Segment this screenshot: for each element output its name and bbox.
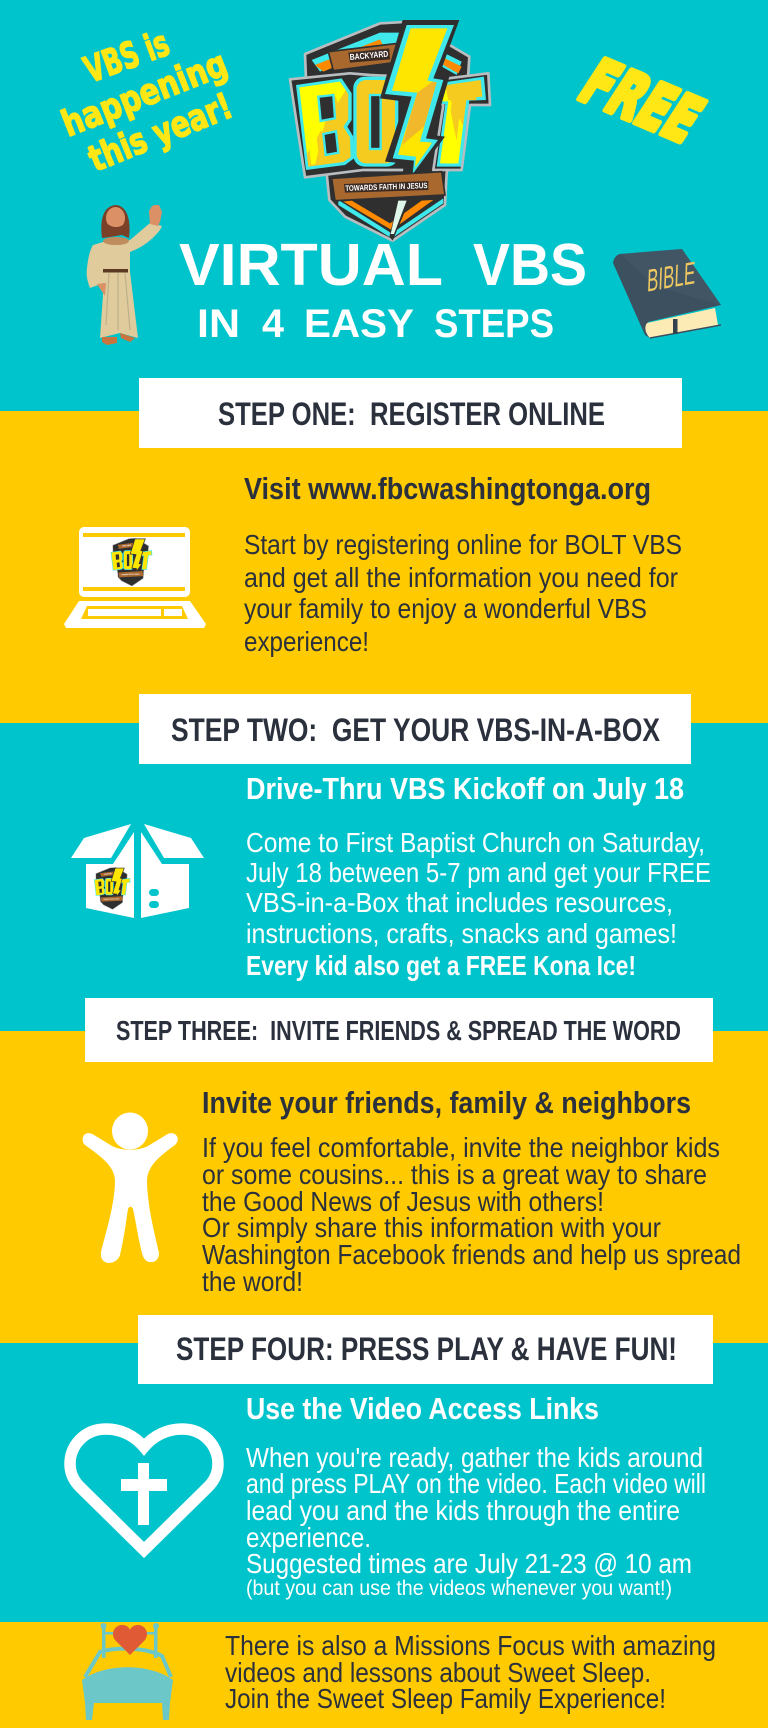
panel: step one	[64, 378, 682, 657]
step four body: lead you and the kids through the entire	[246, 1495, 680, 1526]
step one body: your family to enjoy a wonderful VBS	[244, 593, 647, 624]
title: in 4 easy steps: IN	[197, 302, 240, 346]
step three body	[202, 1132, 741, 1297]
title: Virtual VBS: VBS	[473, 232, 587, 298]
step two body: VBS-in-a-Box that includes resources,	[246, 887, 673, 918]
logo: Backyard BOLT: B	[297, 64, 351, 188]
small logo on laptop: O	[124, 547, 132, 575]
panel: step four	[70, 1315, 713, 1600]
small logo on box: T	[119, 877, 129, 900]
logo: Backyard BOLT	[290, 20, 490, 241]
small logo on box: TOWARDS FAITH IN JESUS	[103, 897, 119, 901]
small logo on laptop: BACKYARD	[122, 544, 132, 548]
step three subheading: Invite your friends, family & neighbors	[202, 1085, 691, 1120]
small logo on box: O	[106, 874, 113, 899]
step one body: experience!	[244, 626, 369, 657]
step four subheading: Use the Video Access Links	[246, 1391, 599, 1426]
step one subheading: Visit www.fbcwashingtonga.org	[244, 471, 651, 506]
step four body: When you're ready, gather the kids around	[246, 1442, 703, 1473]
step one banner	[139, 378, 682, 448]
logo: Backyard BOLT: BACKYARD	[349, 49, 389, 62]
logo: Backyard BOLT: O	[359, 60, 394, 188]
missions text: Join the Sweet Sleep Family Experience!	[225, 1683, 666, 1714]
logo: Backyard BOLT: T	[426, 65, 481, 187]
step two banner	[139, 694, 691, 764]
step two body	[246, 827, 711, 981]
text: VBS is happening this year	[56, 23, 238, 180]
icon: person with raised arms	[83, 1112, 178, 1263]
small logo on laptop	[111, 538, 152, 586]
small logo on box: BACKYARD	[104, 872, 112, 876]
step two body: instructions, crafts, snacks and games!	[246, 918, 677, 949]
text: VBS is happening this year: VBS is	[79, 23, 175, 91]
step one heading: STEP ONE: REGISTER ONLINE	[218, 396, 605, 432]
icon: Bible	[613, 249, 721, 338]
icon: open box	[71, 824, 204, 918]
step three body: the word!	[202, 1266, 303, 1297]
logo: Backyard BOLT: TOWARDS FAITH IN JESUS	[345, 181, 428, 193]
panel: step three	[83, 998, 741, 1297]
missions text: There is also a Missions Focus with amazing	[225, 1630, 716, 1661]
title: in 4 easy steps: STEPS	[434, 302, 554, 346]
step two body: Come to First Baptist Church on Saturday,	[246, 827, 705, 858]
step four body	[246, 1442, 706, 1600]
title: Virtual VBS	[179, 232, 587, 298]
step three body: the Good News of Jesus with others!	[202, 1186, 604, 1217]
missions text: videos and lessons about Sweet Sleep.	[225, 1657, 651, 1688]
step four body: Suggested times are July 21-23 @ 10 am	[246, 1548, 692, 1579]
step one body: and get all the information you need for	[244, 562, 678, 593]
icon: laptop	[64, 527, 206, 628]
panel: step two	[71, 694, 711, 981]
step one body	[244, 529, 682, 657]
panel: missions focus	[82, 1623, 716, 1720]
small logo on box: B	[94, 876, 105, 900]
step four body: (but you can use the videos whenever you want!)	[246, 1577, 672, 1600]
step three body: or some cousins... this is a great way to share	[202, 1159, 707, 1190]
step three body: If you feel comfortable, invite the neighbor kids	[202, 1132, 720, 1163]
small logo on laptop: B	[111, 548, 123, 575]
missions text	[225, 1630, 716, 1714]
title: Virtual VBS: VIRTUAL	[179, 232, 443, 298]
icon: Bible: BIBLE	[646, 255, 696, 299]
icon: Jesus figure	[87, 205, 162, 345]
step two heading: STEP TWO: GET YOUR VBS-IN-A-BOX	[171, 712, 661, 748]
small logo on box	[94, 867, 130, 909]
step four banner	[138, 1315, 713, 1384]
step three body: Or simply share this information with your	[202, 1212, 661, 1243]
icon: heart with cross	[70, 1429, 218, 1550]
title: in 4 easy steps: 4	[262, 302, 285, 346]
step two body: Every kid also get a FREE Kona Ice!	[246, 950, 636, 981]
icon: bed with heart	[82, 1623, 173, 1720]
small logo on laptop: TOWARDS FAITH IN JESUS	[121, 573, 140, 576]
text: VBS is happening this year: happening	[56, 43, 233, 145]
step one body: Start by registering online for BOLT VBS	[244, 529, 682, 560]
step two subheading: Drive-Thru VBS Kickoff on July 18	[246, 771, 684, 806]
step three banner	[85, 998, 713, 1062]
text: FREE: FREE	[566, 47, 716, 157]
title: in 4 easy steps	[197, 302, 554, 346]
title: in 4 easy steps: EASY	[304, 302, 414, 346]
small logo on laptop: T	[139, 548, 151, 575]
text: VBS is happening this year: this year!	[83, 86, 238, 180]
step four body: experience.	[246, 1522, 371, 1553]
